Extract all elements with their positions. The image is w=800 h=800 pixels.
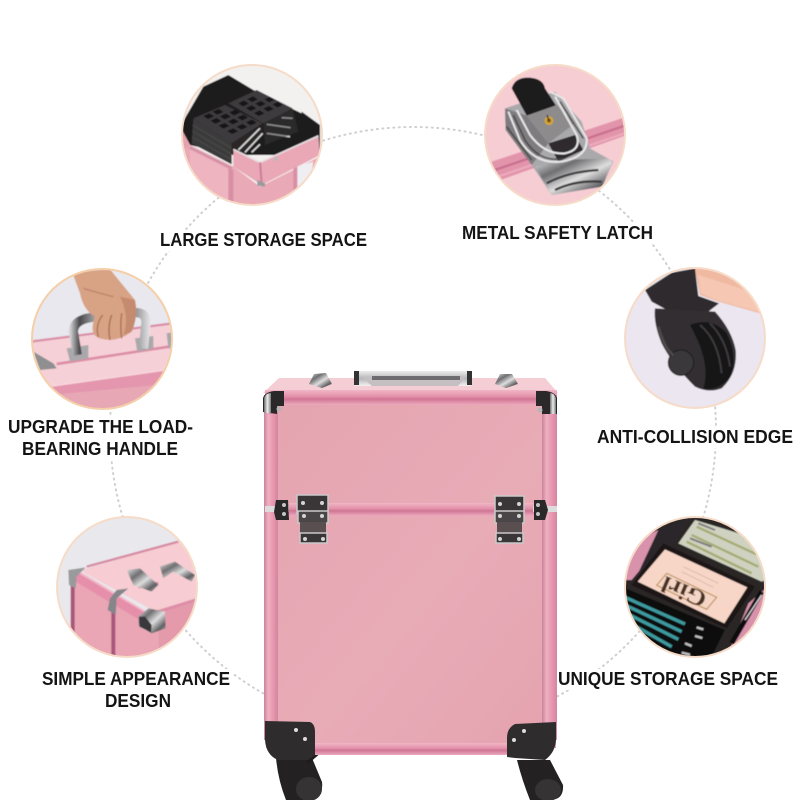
corner guard: top left xyxy=(263,391,284,414)
left rail xyxy=(264,395,278,740)
case lid top xyxy=(263,378,558,393)
label: upgrade the load-bearing handle xyxy=(6,417,196,460)
bottom rail xyxy=(275,743,513,755)
dotted connecting ring xyxy=(110,127,716,733)
label: upgrade the load-bearing handle: BEARING HANDLE xyxy=(22,439,178,459)
middle rail xyxy=(276,503,543,516)
feature photo: metal safety latch xyxy=(484,64,626,206)
top rail xyxy=(265,390,557,405)
right rail xyxy=(542,395,557,740)
feature photo: anti-collision wheel xyxy=(624,267,766,409)
bottom corner bracket: right xyxy=(507,722,556,760)
label: upgrade the load-bearing handle: UPGRADE THE LOAD- xyxy=(8,417,193,437)
top carry handle xyxy=(354,371,472,386)
label: simple appearance design: DESIGN xyxy=(105,691,171,711)
feature photo: large storage space xyxy=(181,64,323,206)
rear wheels and front casters xyxy=(276,752,563,800)
front latch: left xyxy=(297,495,328,543)
side hinges xyxy=(265,500,557,520)
label: simple appearance design: SIMPLE APPEARANCE xyxy=(42,669,230,689)
label: large storage space: LARGE STORAGE SPACE xyxy=(160,230,367,250)
central pink trolley case xyxy=(263,371,563,800)
label: simple appearance design xyxy=(40,669,233,712)
feature photo: upgraded load-bearing handle xyxy=(31,268,173,410)
bottom corner bracket: left xyxy=(265,721,315,760)
label: anti-collision edge: ANTI-COLLISION EDGE xyxy=(597,427,793,447)
label: unique storage space: UNIQUE STORAGE SPACE xyxy=(558,669,778,689)
corner guard: top right xyxy=(536,391,557,414)
lid latches xyxy=(309,373,518,388)
label: metal safety latch: METAL SAFETY LATCH xyxy=(462,223,653,243)
front latch: right xyxy=(495,496,524,543)
front panel xyxy=(266,398,556,748)
feature photo: unique storage space: Girl xyxy=(657,570,711,612)
feature photo: simple appearance design xyxy=(56,516,198,658)
feature photo: unique storage space xyxy=(624,516,766,658)
